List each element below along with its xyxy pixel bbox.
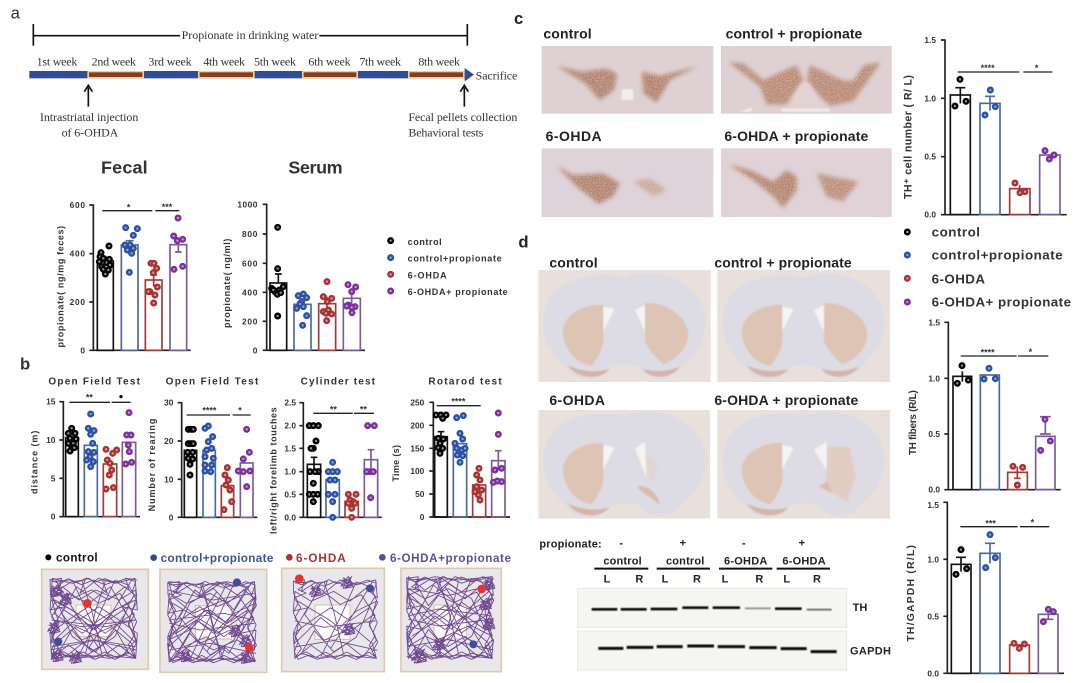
chart: TH over GAPDH: TH/GAPDH (R/L) [906,545,917,642]
micrograph: 6-OHDA section [538,410,710,519]
micrograph: 6-OHDA [542,148,713,217]
chart: fecal propionate [55,200,191,355]
chart: cylinder test: left/right forelimb touches [269,407,279,534]
chart: fecal propionate: propionate( ng/mg feces) [55,226,65,347]
panel d: striatum micrographs [518,233,890,519]
chart: serum propionate: 200 [242,316,258,326]
tick labels: 0.5 [924,152,936,162]
chart: TH fibers: 0.0 [928,485,940,495]
axis label: TH⁺ cell number ( R/ L) [902,75,914,199]
label: control: control [543,25,592,41]
group labels: R [693,573,701,585]
panel c chart: TH positive cell number [902,35,1071,310]
chart: open field rearing: Number of rearing [147,419,157,511]
chart: TH over GAPDH: *** [985,518,996,528]
blot: GAPDH [578,631,847,670]
legend: treatment groups [388,237,508,297]
chart: rotarod test: **** [451,396,466,406]
chart: cylinder test: Cylinder test [301,376,376,387]
panel d charts: TH fibers and TH/GAPDH [906,317,1064,678]
week labels: 3rd week [148,54,192,68]
collection label: Behavioral tests [408,126,484,140]
chart: cylinder test: 0.0 [284,512,296,522]
blot label: GAPDH: GAPDH [850,645,891,657]
blot label: TH: TH [853,602,867,614]
chart: open field distance [29,376,141,522]
timeline bar [29,68,474,81]
group labels: control [666,556,704,568]
significance bars: * [1035,63,1039,73]
chart: TH fibers: TH fibers (R/L) [908,390,919,455]
collection label [408,110,517,140]
chart: open field rearing: 20 [164,436,174,446]
propionate treatment bracket [33,24,467,46]
arrow: collection time point [460,85,468,107]
chart: open field rearing [147,376,259,522]
chart: TH over GAPDH [906,500,1064,678]
legend: panels c and d [905,225,1071,310]
chart: serum propionate: 1000 [237,199,258,209]
chart: open field distance: 15 [46,397,56,407]
micrograph: control plus propionate [721,46,892,114]
group labels: R [755,573,763,585]
chart: open field rearing: 30 [164,398,174,408]
chart: open field distance: ** [86,392,93,402]
panel letter c: c [514,9,523,28]
legend: panels c and d: control [932,225,980,240]
chart: TH fibers: 0.5 [928,429,940,439]
tick labels [924,35,936,220]
chart: TH over GAPDH: 1.5 [927,500,939,510]
chart: open field rearing: 0 [169,512,174,522]
chart: TH fibers [908,317,1061,495]
chart: serum propionate: 400 [242,287,258,297]
chart: open field rearing: **** [202,406,217,416]
label: 6-OHDA + propionate: 6-OHDA + propionate [714,392,859,408]
chart: cylinder test [269,376,382,534]
chart: TH fibers: 1.0 [928,373,940,383]
blot: TH [578,588,847,627]
chart: cylinder test: 1.0 [284,467,296,477]
chart: TH fibers: **** [981,348,995,358]
data points [953,77,1056,195]
label: 6-OHDA: 6-OHDA [546,128,602,144]
micrograph: control [542,46,713,114]
group labels: R [813,573,821,585]
chart: fecal propionate: *** [162,202,173,212]
label: control: control [549,254,598,270]
chart: open field rearing: 10 [164,474,174,484]
chart: open field distance: 5 [51,473,56,483]
panel c: substantia nigra micrographs [514,9,892,217]
sacrifice label: Sacrifice [476,68,517,82]
legend: treatment groups: control+propionate [408,254,502,264]
micrograph: control section [538,270,711,382]
chart: TH fibers: 1.5 [928,317,940,327]
panel a: experimental timeline [11,3,517,140]
chart: fecal propionate: * [127,203,131,213]
arrow: injection time point [84,85,92,107]
label: 6-OHDA + propionate: 6-OHDA + propionate [724,128,869,144]
legend: track groups: 6-OHDA+propionate [390,552,512,565]
panel letter b: b [20,354,30,373]
chart: open field distance: 0 [51,512,56,522]
label: control + propionate: control + propionate [726,25,863,41]
chart: cylinder test: ** [330,404,337,414]
propionate row: + [799,538,805,550]
legend: treatment groups: 6-OHDA+ propionate [408,287,508,297]
chart: TH over GAPDH: * [1031,518,1035,528]
chart: rotarod test: 250 [410,397,425,407]
chart: rotarod test: 200 [410,420,425,430]
chart: cylinder test: 0.5 [284,489,296,499]
chart: cylinder test: 2.0 [284,421,296,431]
chart: open field distance: distance (m) [29,431,39,494]
track plot: control plus propionate [160,569,267,672]
group labels: L [604,573,611,585]
chart: open field rearing: Open Field Test [166,376,259,387]
group labels: control [603,556,642,568]
chart: cylinder test: ** [360,404,367,414]
chart: cylinder test: 2.5 [284,398,296,408]
chart: serum propionate [222,199,365,355]
panel d: western blot [539,538,891,670]
chart: serum propionate: 600 [242,258,258,268]
panel b: open field track plots [42,552,512,672]
label: control + propionate: control + propionate [714,254,852,270]
track plot: 6-OHDA [282,568,384,672]
propionate treatment bracket: Propionate in drinking water [182,28,318,42]
chart: rotarod test: 50 [415,489,425,499]
chart: cylinder test: 1.5 [284,443,296,453]
chart: open field distance: Open Field Test [48,376,141,387]
propionate row [539,538,805,550]
legend: track groups: 6-OHDA [296,552,346,565]
chart: rotarod test: 150 [410,443,425,453]
legend: track groups: control+propionate [161,552,274,565]
track plot: 6-OHDA plus propionate [401,568,501,672]
chart: open field rearing: * [238,406,242,416]
group labels: L [783,573,790,585]
chart: open field distance: 10 [46,435,56,445]
legend: panels c and d: 6-OHDA+ propionate [932,295,1071,310]
panel letter a: a [11,3,21,22]
week labels: 7th week [359,54,401,68]
label: 6-OHDA: 6-OHDA [549,392,605,408]
group labels [594,556,830,585]
chart: rotarod test: 0 [420,512,425,522]
group labels: R [635,573,643,585]
chart: rotarod test: Rotarod test [428,376,502,387]
tick labels: 1.5 [924,35,936,45]
micrograph: control plus propionate section [717,270,890,382]
significance bars: **** [981,63,995,73]
chart: fecal propionate: 600 [70,200,85,210]
week labels: 8th week [418,54,460,68]
chart: TH over GAPDH: 1.0 [927,554,939,564]
chart: fecal propionate: 0 [80,345,85,355]
week labels: 6th week [308,54,351,68]
group labels: 6-OHDA [724,556,767,568]
injection label [40,110,138,140]
chart: rotarod test [391,376,510,522]
chart: TH fibers: * [1029,347,1033,357]
chart: rotarod test: Time (s) [391,445,401,482]
propionate row: - [619,538,623,550]
heading: Serum: Serum [288,158,343,178]
chart: fecal propionate: 200 [70,297,85,307]
bars [950,88,1060,215]
micrograph: 6-OHDA plus propionate [721,148,892,217]
week labels: 5th week [254,54,296,68]
legend: panels c and d: control+propionate [932,247,1063,262]
chart: serum propionate: 0 [253,345,258,355]
legend: treatment groups: 6-OHDA [408,270,447,280]
chart: fecal propionate: 400 [70,249,85,259]
collection label: Fecal pellets collection [408,110,517,124]
tick labels: 1.0 [924,93,936,103]
legend: panels c and d: 6-OHDA [932,271,985,286]
tick labels: 0.0 [924,210,936,220]
week labels: 4th week [203,54,245,68]
week labels: 1st week [37,54,77,68]
injection label: of 6-OHDA [62,126,119,140]
legend: track groups [45,552,512,565]
group labels: L [662,573,669,585]
chart: TH over GAPDH: 0.0 [927,668,939,678]
legend: treatment groups: control [408,237,442,247]
group labels: L [722,573,729,585]
significance bars [958,63,1052,73]
legend: track groups: control [56,552,98,565]
track plot: control [42,569,148,669]
chart: TH over GAPDH: 0.5 [927,611,939,621]
propionate row: + [680,538,686,550]
group labels: 6-OHDA [782,556,826,568]
micrograph: 6-OHDA plus propionate section [717,410,890,519]
heading: Fecal: Fecal [101,158,148,178]
chart: serum propionate: 800 [242,229,258,239]
week labels [37,54,460,68]
injection label: Intrastriatal injection [40,110,138,124]
panel a charts: fecal and serum propionate [55,158,508,355]
panel b: behavioral bar charts [20,354,510,534]
propionate row: - [742,538,746,550]
week labels: 2nd week [92,54,136,68]
propionate row: propionate: [539,538,602,550]
chart: rotarod test: 100 [410,466,425,476]
panel letter d: d [518,233,529,252]
chart: serum propionate: propionate( ng/ml) [222,239,232,328]
